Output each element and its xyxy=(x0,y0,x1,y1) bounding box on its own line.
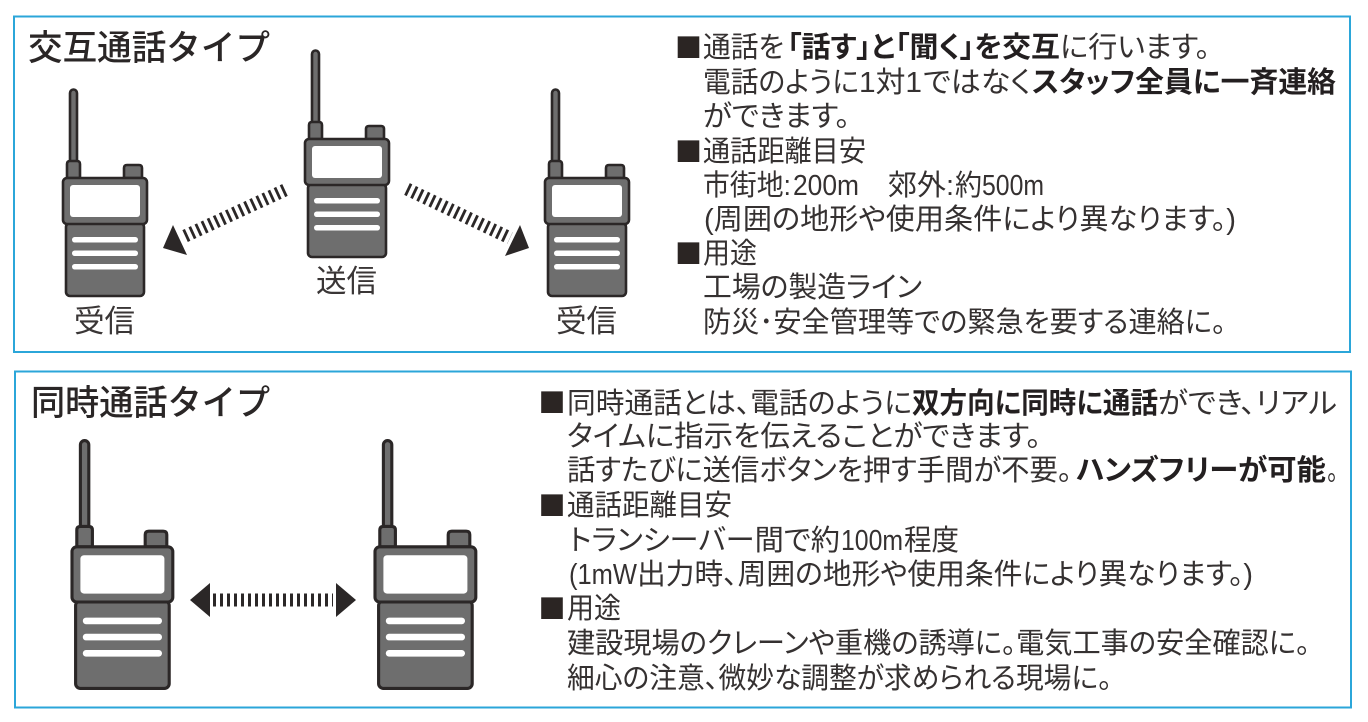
text block: 交互通話 description: 郊外: xyxy=(888,169,954,202)
text block: 交互通話 description: 市街地: xyxy=(703,169,791,202)
text block: 交互通話 description: 防災･安全管理等での緊急を要する連絡に。 xyxy=(703,306,1226,339)
text block: 同時通話 description: 用途 xyxy=(567,593,621,625)
text block: 交互通話 description xyxy=(675,26,1336,339)
text block: 同時通話 description: 双方向に同時に通話 xyxy=(912,387,1158,420)
text block: 同時通話 description: タイムに指示を伝えることができます。 xyxy=(567,420,1041,453)
heading: 交互通話タイプ: 交互通話タイプ xyxy=(28,29,270,68)
icon: left radio xyxy=(72,441,173,688)
arrow: centre to right radio xyxy=(407,189,529,256)
text block: 交互通話 description: 工場の製造ライン xyxy=(703,271,922,304)
label: right 受信: 受信 xyxy=(556,304,617,339)
icon: centre transmitting radio xyxy=(305,50,389,257)
text block: 同時通話 description: ■ xyxy=(538,588,566,626)
text block: 交互通話 description: スタッフ全員に一斉連絡 xyxy=(1032,66,1336,99)
text block: 交互通話 description: ■ xyxy=(675,130,702,170)
text block: 交互通話 description: に行います。 xyxy=(1060,31,1210,64)
label: 送信: 送信 xyxy=(316,264,377,299)
panel: 同時通話タイプ xyxy=(15,372,1351,708)
text block: 同時通話 description: ■ xyxy=(538,382,566,420)
text block: 交互通話 description: ではなく xyxy=(923,67,1031,99)
text block: 交互通話 description: 電話のように xyxy=(703,67,859,99)
text block: 交互通話 description: ができます。 xyxy=(703,100,850,133)
text block: 同時通話 description: トランシーバー間で約 xyxy=(569,524,840,557)
arrow: two-way xyxy=(190,583,356,617)
text block: 同時通話 description: ができ、リアル xyxy=(1158,387,1337,420)
icon: right radio xyxy=(375,441,476,688)
text block: 同時通話 description: 建設現場のクレーンや重機の誘導に。電気工事の安全確認に。 xyxy=(567,627,1310,660)
text block: 同時通話 description: 通話距離目安 xyxy=(567,489,732,522)
text block: 交互通話 description: 200m xyxy=(793,170,859,202)
text block: 同時通話 description: (1mW xyxy=(569,559,638,591)
arrow: centre to left radio xyxy=(163,190,285,255)
text block: 交互通話 description: ■ xyxy=(675,26,702,66)
icon: right receiving radio xyxy=(545,90,629,296)
text block: 交互通話 description: (周囲の地形や使用条件により異なります。) xyxy=(704,203,1236,236)
text block: 交互通話 description: 約 xyxy=(955,169,982,202)
text block: 同時通話 description: 100m xyxy=(841,525,903,557)
text block: 同時通話 description: 細心の注意、微妙な調整が求められる現場に。 xyxy=(567,662,1112,695)
text block: 同時通話 description: 話すたびに送信ボタンを押す手間が不要。 xyxy=(567,454,1072,487)
text block: 交互通話 description: 1対1 xyxy=(859,66,922,99)
text block: 交互通話 description: 用途 xyxy=(703,238,757,270)
heading: 同時通話タイプ: 同時通話タイプ xyxy=(31,384,270,423)
text block: 同時通話 description: 程度 xyxy=(904,524,959,557)
text block: 同時通話 description: 。 xyxy=(1327,455,1338,487)
text block: 交互通話 description: 500m xyxy=(982,170,1044,202)
text block: 交互通話 description: 通話距離目安 xyxy=(703,135,866,168)
text block: 同時通話 description: ■ xyxy=(538,484,566,524)
text block: 同時通話 description xyxy=(538,382,1338,695)
text block: 同時通話 description: 同時通話とは、電話のように xyxy=(567,387,912,420)
text block: 同時通話 description: 出力時、周囲の地形や使用条件により異なります。) xyxy=(637,558,1253,591)
panel: 交互通話タイプ xyxy=(14,16,1350,352)
text block: 交互通話 description: ■ xyxy=(675,232,702,272)
text block: 交互通話 description: 通話を xyxy=(703,32,784,64)
icon: left receiving radio xyxy=(63,90,147,296)
text block: 同時通話 description: ハンズフリーが可能 xyxy=(1076,453,1326,487)
label: left 受信: 受信 xyxy=(74,304,135,339)
text block: 交互通話 description: 「話す」と「聞く」を交互 xyxy=(787,31,1060,64)
